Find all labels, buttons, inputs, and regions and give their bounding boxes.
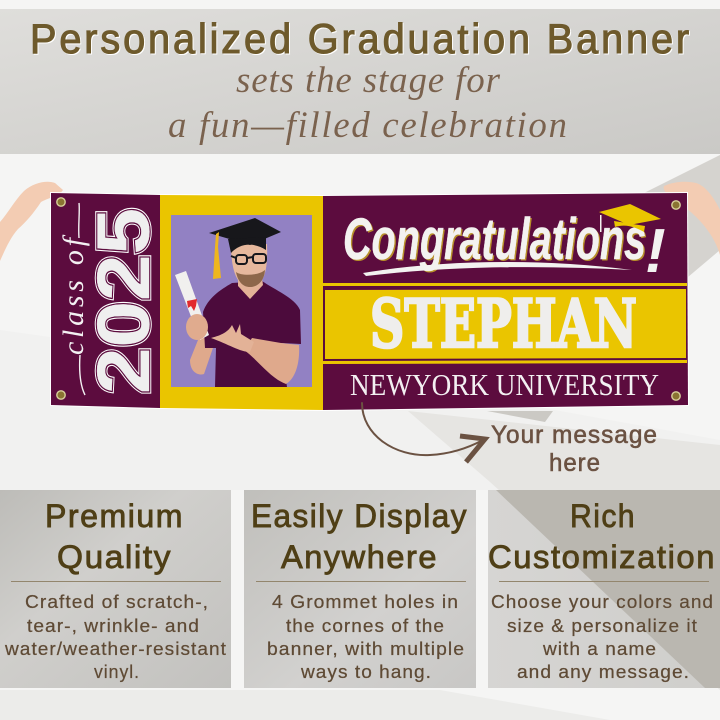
swoosh bbox=[363, 262, 632, 276]
panel: easily display anywhere bbox=[244, 490, 476, 688]
subtitle script: sets the stage for bbox=[236, 60, 501, 101]
university: NEWYORK UNIVERSITY bbox=[350, 367, 659, 402]
icon: left hand bbox=[0, 182, 63, 261]
body text: vinyl. bbox=[94, 661, 140, 682]
heading bbox=[251, 498, 468, 575]
panel: photo frame bbox=[160, 195, 323, 410]
neck bbox=[238, 278, 263, 299]
subtitle script bbox=[168, 60, 567, 146]
body text: water/weather-resistant bbox=[4, 638, 227, 659]
body text: the cornes of the bbox=[286, 615, 445, 636]
heading: Customization bbox=[488, 539, 716, 575]
ribbon bbox=[187, 299, 197, 311]
Congratulations script: ! bbox=[645, 217, 666, 286]
face bbox=[231, 244, 267, 287]
fist bbox=[186, 314, 208, 340]
callout: your message here: Your message bbox=[491, 421, 658, 449]
body text: size & personalize it bbox=[507, 615, 698, 636]
year 2025: 2025 bbox=[82, 208, 165, 394]
heading bbox=[45, 498, 184, 575]
arm left bbox=[190, 335, 214, 374]
title: Personalized Graduation Banner bbox=[30, 15, 692, 62]
year 2025: 2025 bbox=[82, 208, 165, 394]
icon: right hand bbox=[664, 182, 720, 255]
body text bbox=[267, 591, 465, 682]
heading: Premium bbox=[45, 498, 184, 534]
body text: and any message. bbox=[517, 661, 690, 682]
icon: graduation cap bbox=[599, 204, 661, 232]
panel: rich customization bbox=[488, 490, 720, 688]
heading bbox=[488, 498, 716, 575]
callout: your message here bbox=[491, 421, 658, 477]
icon: grommets bbox=[57, 198, 680, 400]
shirt bbox=[203, 281, 301, 387]
banner bbox=[50, 192, 689, 411]
arm right bbox=[244, 338, 299, 384]
header panel bbox=[0, 9, 720, 154]
body text: with a name bbox=[542, 638, 657, 659]
name band bbox=[323, 283, 687, 364]
heading: Easily Display bbox=[251, 498, 468, 534]
body text: 4 Grommet holes in bbox=[272, 591, 459, 612]
arrow bbox=[362, 403, 485, 462]
heading: Quality bbox=[57, 539, 172, 575]
body text: banner, with multiple bbox=[267, 638, 465, 659]
class of script: class of bbox=[57, 234, 90, 355]
heading: Anywhere bbox=[281, 539, 438, 575]
body text bbox=[4, 591, 227, 682]
body text: ways to hang. bbox=[300, 661, 432, 682]
cap bbox=[209, 218, 281, 245]
diploma bbox=[175, 271, 209, 340]
subtitle script: a fun—filled celebration bbox=[168, 105, 567, 146]
heading: Rich bbox=[570, 498, 636, 534]
panel: message bbox=[323, 193, 688, 410]
class of script bbox=[57, 203, 90, 395]
body text: Choose your colors and bbox=[491, 591, 714, 612]
glasses bbox=[231, 254, 266, 264]
hand bbox=[211, 324, 254, 352]
photo: graduate bbox=[175, 218, 301, 387]
body text bbox=[491, 591, 714, 682]
panel: premium quality bbox=[0, 490, 231, 688]
year 2025: 2025 bbox=[82, 208, 165, 394]
callout: your message here: here bbox=[549, 449, 601, 477]
body text: tear-, wrinkle- and bbox=[27, 615, 200, 636]
panel: class of 2025 bbox=[51, 193, 165, 408]
tassel bbox=[213, 232, 221, 279]
body text: Crafted of scratch-, bbox=[25, 591, 209, 612]
